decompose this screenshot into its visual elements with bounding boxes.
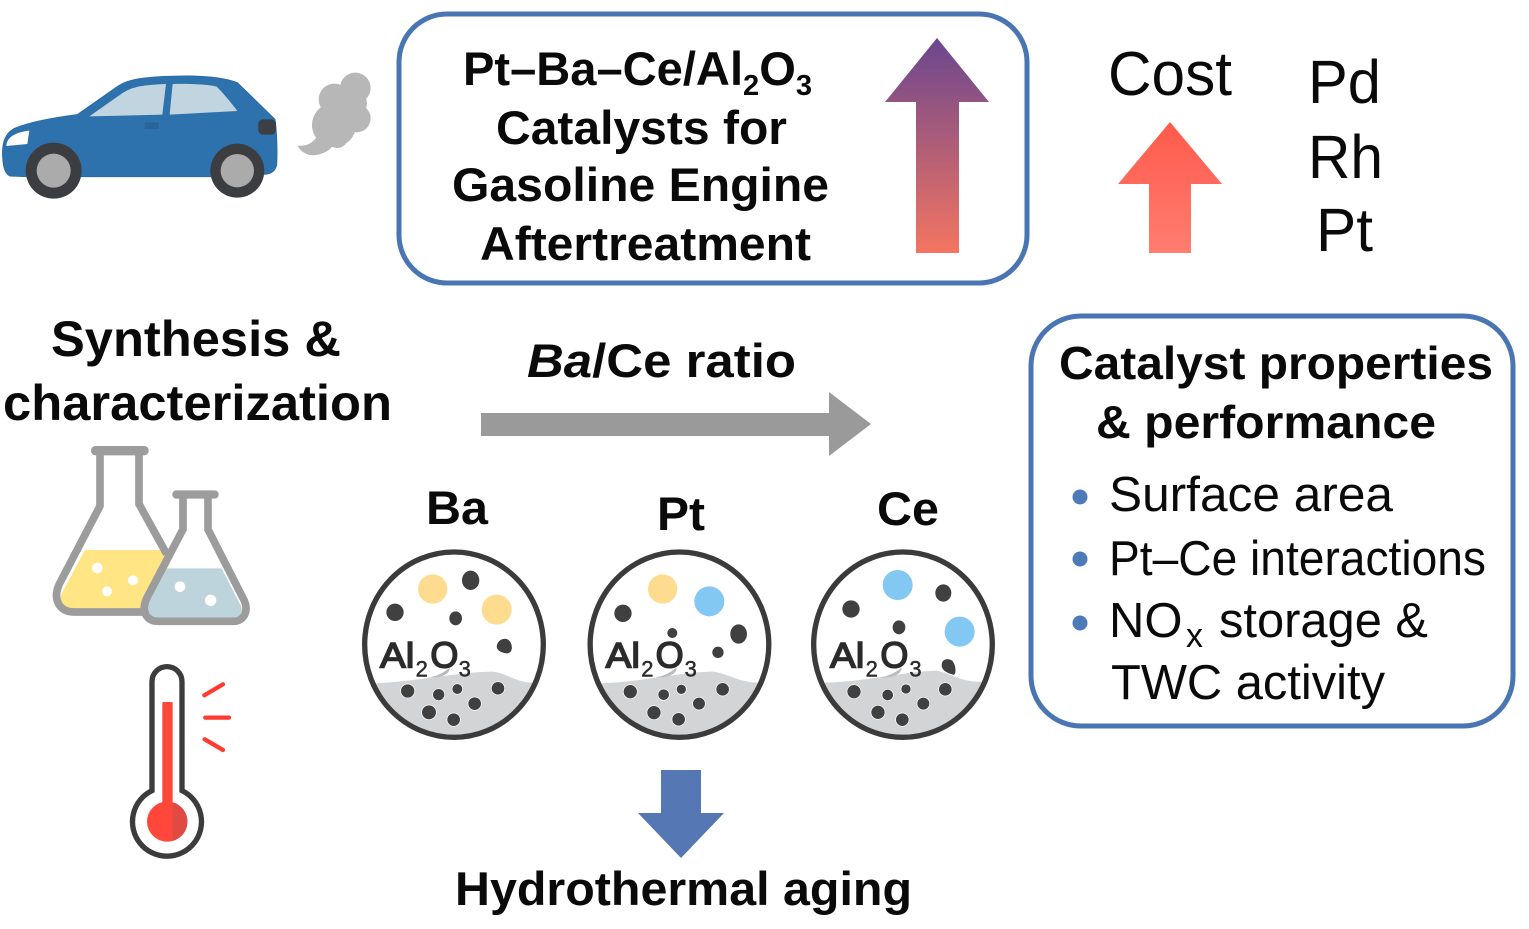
title line 1: Pt–Ba–Ce/Al [463, 42, 742, 95]
label: Ba: Ba [426, 481, 489, 534]
particle circle: Ce [814, 552, 992, 737]
label: cost: Cost [1108, 40, 1232, 109]
particle circle: Ce: O [880, 634, 908, 675]
panel: catalyst properties [1031, 316, 1513, 726]
label: Pt: Pt [657, 487, 705, 540]
panel heading: Catalyst properties [1059, 337, 1493, 389]
heading: synthesis and characterization: Synthesis & [51, 311, 341, 367]
particle circle: Pt: 2 [641, 657, 654, 682]
bullets [1072, 490, 1088, 630]
flask: small [144, 490, 246, 621]
particle circle: Pt: O [656, 634, 684, 675]
particle circle: Ce: 2 [866, 657, 878, 682]
item: NOx storage: NO [1109, 594, 1182, 648]
heading: synthesis and characterization: characterization [3, 375, 392, 431]
door handle [145, 122, 159, 129]
heading: synthesis and characterization [3, 311, 392, 431]
wheel: front [26, 143, 82, 199]
particle circle: Pt [590, 552, 769, 737]
particle circle: Ba: 3 [459, 657, 471, 682]
arrow: gradient up [885, 38, 989, 253]
title line 2: Catalysts for [496, 101, 787, 154]
particle circle: Pt: Al [606, 636, 640, 675]
metals list: Pt [1316, 196, 1373, 264]
heat marks [204, 684, 229, 750]
item: surface area: Surface area [1109, 468, 1394, 522]
flask: large [57, 446, 170, 612]
panel heading [1059, 337, 1493, 448]
arrow: cost up [1118, 122, 1222, 253]
title line 4: Aftertreatment [480, 217, 811, 270]
particle circle: Ba: O [430, 634, 458, 675]
item: NOx storage [1109, 594, 1428, 655]
item: Pt-Ce interactions: Pt–Ce interactions [1109, 532, 1486, 586]
label: Ce: Ce [877, 482, 939, 535]
headlight [6, 131, 29, 146]
item: NOx storage: storage & [1219, 594, 1428, 648]
item: NOx storage: x [1186, 617, 1203, 655]
tail light [258, 119, 276, 135]
panel heading: & performance [1096, 396, 1436, 448]
arrow: ratio [481, 392, 871, 456]
label: hydrothermal aging: Hydrothermal aging [455, 862, 912, 915]
icon: thermometer [132, 667, 229, 856]
icon: car [3, 76, 277, 199]
title line 3: Gasoline Engine [452, 158, 829, 211]
particle circle: Ce: Al [830, 636, 864, 675]
metals list: Rh [1308, 123, 1383, 191]
particle circle: Pt: 3 [685, 657, 697, 682]
item: TWC activity: TWC activity [1111, 656, 1385, 710]
title line 1: O [759, 42, 796, 95]
window: rear [170, 84, 237, 115]
particle circle: Ba: Al [380, 636, 414, 675]
metals list: Pd [1308, 48, 1381, 116]
title line 1: 3 [796, 70, 812, 102]
particle circle: Ba: 2 [416, 657, 428, 682]
metals list [1308, 48, 1383, 264]
wheel: rear [210, 144, 264, 198]
title line 1: 2 [743, 70, 759, 102]
arrow: hydrothermal aging down [638, 770, 724, 858]
icon: exhaust smoke [298, 73, 371, 155]
panel: title box [399, 14, 1027, 283]
particle circle: Ba [365, 552, 543, 737]
label: Ba/Ce ratio: Ba/Ce ratio [527, 334, 796, 387]
icon: flasks [57, 446, 246, 621]
particle circle: Ce: 3 [909, 657, 922, 682]
window: windscreen [89, 84, 166, 116]
